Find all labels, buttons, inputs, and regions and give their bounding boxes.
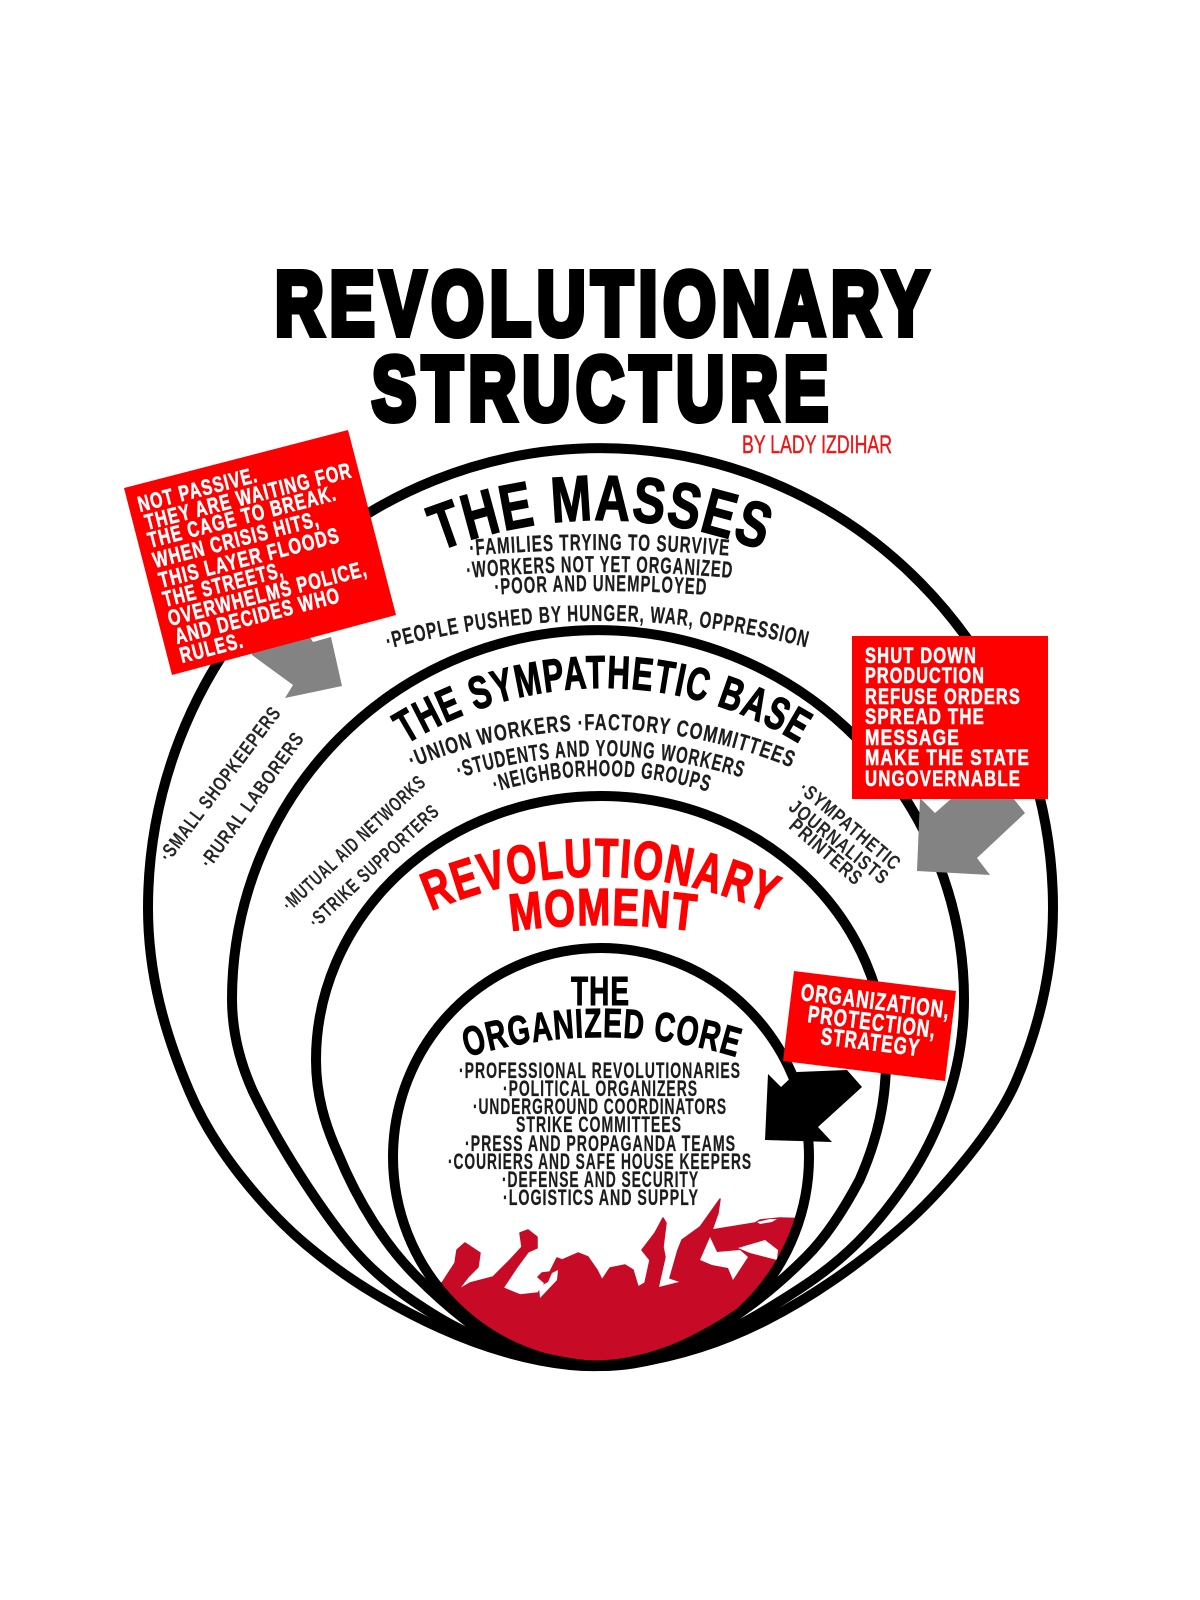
side labels: sympathetic base right: ·SYMPATHETIC: [794, 778, 905, 875]
callout: shut down production: SHUT DOWN: [865, 643, 977, 668]
heading: the organized core: THE: [571, 968, 630, 1014]
callout: not passive: THIS LAYER FLOODS: [156, 522, 342, 593]
callout: shut down production: PRODUCTION: [865, 663, 985, 688]
list: organized core members: STRIKE COMMITTEES: [516, 1112, 682, 1137]
callout: organization protection strategy: STRATEGY: [819, 1023, 922, 1062]
callout: not passive: WHEN CRISIS HITS,: [150, 506, 322, 573]
side labels: sympathetic base right: JOURNALISTS: [784, 796, 893, 889]
list: organized core members: ·PROFESSIONAL REVOLUTIONARIES: [459, 1058, 741, 1083]
heading: the organized core: [462, 968, 743, 1058]
side labels: masses: [155, 703, 309, 872]
byline: BY LADY IZDIHAR: [742, 431, 892, 459]
the sympathetic base layer text: [390, 656, 814, 791]
title: STRUCTURE: [372, 340, 834, 440]
callout: not passive: AND DECIDES WHO: [172, 582, 343, 649]
list: organized core members: ·POLITICAL ORGANIZERS: [503, 1076, 698, 1101]
callout: shut down production: [852, 636, 1048, 799]
list: organized core members: ·COURIERS AND SAFE HOUSE KEEPERS: [448, 1149, 752, 1174]
diagram: revolutionary structure: [124, 268, 1058, 1372]
callout: shut down production: UNGOVERNABLE: [865, 766, 1021, 791]
side labels: sympathetic base left: [278, 771, 444, 932]
side labels: masses: ·RURAL LABORERS: [196, 728, 309, 872]
heading: the masses: THE MASSES: [424, 475, 772, 548]
list: masses members: [386, 534, 810, 648]
arrow: black toward core: [765, 1070, 862, 1142]
callout: shut down production: REFUSE ORDERS: [865, 684, 1021, 709]
list: masses members: ·FAMILIES TRYING TO SURVIVE: [470, 534, 730, 556]
list: organized core members: [448, 1058, 752, 1210]
list: organized core members: ·DEFENSE AND SECURITY: [502, 1167, 699, 1192]
callout: not passive: THE STREETS,: [160, 557, 286, 612]
heading: the organized core: ORGANIZED CORE: [462, 1008, 743, 1058]
list: sympathetic base members: ·STUDENTS AND YOUNG WORKERS: [457, 740, 745, 777]
list: organized core members: ·UNDERGROUND COORDINATORS: [473, 1094, 727, 1119]
list: masses members: ·WORKERS NOT YET ORGANIZED: [467, 556, 732, 578]
callout: shut down production: SPREAD THE: [865, 704, 985, 729]
ring: revolutionary moment: [316, 796, 886, 1366]
arrow: gray toward masses: [250, 620, 342, 698]
title: [275, 254, 934, 440]
callout: not passive: NOT PASSIVE.: [135, 462, 260, 517]
callout: not passive: RULES.: [177, 627, 246, 668]
list: organized core members: ·PRESS AND PROPAGANDA TEAMS: [465, 1131, 736, 1156]
list: masses members: ·POOR AND UNEMPLOYED: [495, 575, 706, 595]
callout: organization protection strategy: [783, 971, 956, 1081]
list: organized core members: ·LOGISTICS AND SUPPLY: [503, 1185, 699, 1210]
side labels: sympathetic base right: PRINTERS: [785, 815, 867, 890]
heading: revolutionary moment: MOMENT: [509, 888, 698, 932]
list: sympathetic base members: ·NEIGHBORHOOD GROUPS: [493, 760, 711, 791]
list: sympathetic base members: ·UNION WORKERS ·FACTORY COMMITTEES: [409, 714, 795, 766]
crowd silhouette: [440, 1198, 795, 1360]
callout: not passive: [124, 430, 396, 675]
list: masses members: ·PEOPLE PUSHED BY HUNGER, WAR, OPPRESSION: [386, 604, 810, 648]
arrow: gray toward sympathetic base: [917, 798, 1025, 875]
heading: revolutionary moment: REVOLUTIONARY: [418, 838, 784, 911]
side labels: sympathetic base left: ·MUTUAL AID NETWORKS: [278, 771, 431, 916]
callout: shut down production: MESSAGE: [865, 725, 960, 750]
ring: the sympathetic base: [232, 630, 964, 1366]
callout: shut down production: MAKE THE STATE: [865, 745, 1030, 770]
title: REVOLUTIONARY: [275, 254, 934, 354]
side labels: sympathetic base left: ·STRIKE SUPPORTERS: [305, 800, 444, 932]
callout: organization protection strategy: PROTECTION,: [806, 1001, 938, 1044]
callout: organization protection strategy: ORGANIZATION,: [799, 979, 951, 1024]
side labels: masses: ·SMALL SHOPKEEPERS: [155, 703, 286, 866]
ring: the masses: [148, 448, 1053, 1366]
callout: not passive: OVERWHELMS POLICE,: [165, 556, 370, 631]
callout: not passive: THEY ARE WAITING FOR: [142, 458, 355, 535]
heading: the sympathetic base: THE SYMPATHETIC BASE: [390, 656, 814, 744]
callout: not passive: THE CAGE TO BREAK.: [145, 480, 339, 553]
ring: the organized core: [393, 948, 809, 1366]
the masses layer text: [386, 475, 810, 648]
